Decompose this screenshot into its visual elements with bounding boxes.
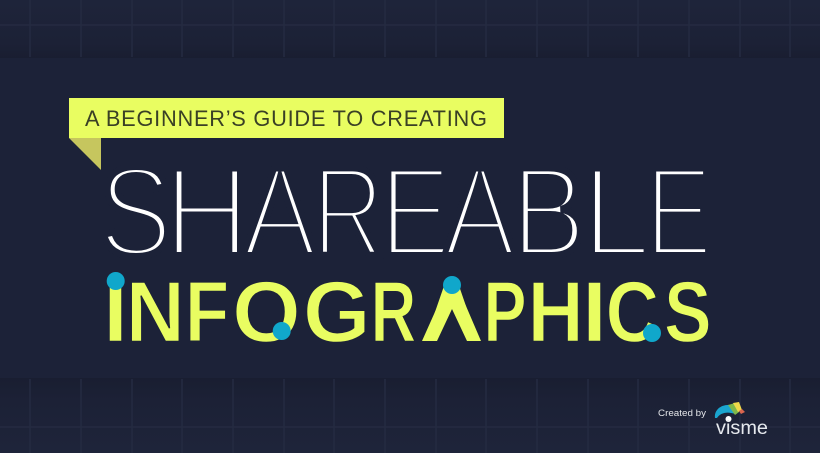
accent dots — [107, 272, 661, 342]
heading: SHAREABLE: L — [581, 140, 651, 282]
heading: INFOGRAPHICS: F — [185, 265, 229, 361]
heading: INFOGRAPHICS: R — [371, 265, 416, 361]
heading: SHAREABLE: S — [99, 140, 172, 282]
heading: SHAREABLE: E — [645, 140, 712, 282]
heading: INFOGRAPHICS: H — [528, 265, 584, 361]
heading: INFOGRAPHICS: I — [582, 265, 607, 361]
credit: created by: Created by — [658, 408, 706, 419]
heading: INFOGRAPHICS: C — [606, 265, 659, 361]
heading: INFOGRAPHICS — [103, 265, 712, 361]
logo: visme — [715, 402, 768, 439]
A crossbar removal: open chevron legs — [422, 285, 481, 343]
heading: INFOGRAPHICS: O — [232, 265, 301, 361]
heading: INFOGRAPHICS: N — [126, 265, 185, 361]
heading: SHAREABLE — [99, 140, 712, 282]
subtitle text: A BEGINNER’S GUIDE TO CREATING — [85, 106, 487, 131]
logo: visme: visme — [716, 418, 768, 439]
heading: SHAREABLE: E — [380, 140, 451, 282]
banner: subtitle ribbon — [69, 98, 504, 170]
heading: SHAREABLE: R — [312, 140, 384, 282]
heading: SHAREABLE: A — [243, 140, 317, 282]
heading: INFOGRAPHICS: P — [484, 265, 526, 361]
heading: SHAREABLE: H — [164, 140, 250, 282]
heading: INFOGRAPHICS: I — [103, 265, 128, 361]
heading: INFOGRAPHICS: G — [303, 265, 370, 361]
heading: INFOGRAPHICS: S — [664, 265, 712, 361]
heading: SHAREABLE: B — [511, 140, 586, 282]
heading: INFOGRAPHICS: A — [422, 265, 481, 361]
heading: SHAREABLE: A — [444, 140, 516, 282]
